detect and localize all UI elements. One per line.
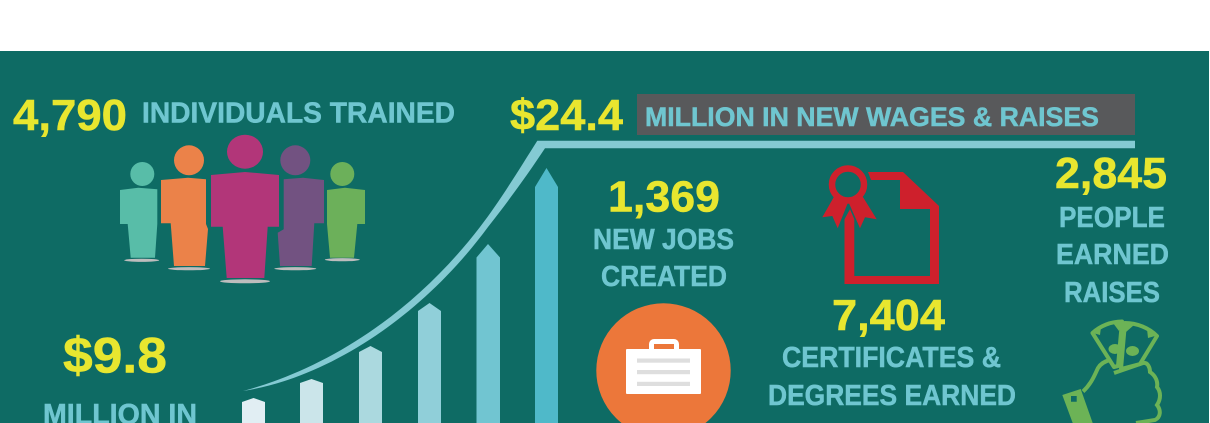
label: created: CREATED [601, 261, 727, 293]
label: earned: EARNED [1056, 239, 1169, 271]
number: 2,845: 2,845 [1055, 149, 1167, 198]
icon: hand holding money [1062, 322, 1160, 423]
label: raises: RAISES [1064, 277, 1160, 309]
icon: certificate with ribbon [822, 168, 939, 284]
number: 1,369: 1,369 [608, 172, 720, 222]
label: individuals trained: INDIVIDUALS TRAINED [142, 98, 455, 130]
stat: people earned raises [1055, 149, 1169, 309]
label: million in new wages and raises: MILLION IN NEW WAGES & RAISES [645, 102, 1099, 132]
number: $9.8: $9.8 [63, 328, 167, 384]
label: new jobs: NEW JOBS [593, 224, 734, 256]
number: 7,404: 7,404 [832, 291, 946, 340]
label: degrees earned: DEGREES EARNED [768, 380, 1016, 412]
stat: new jobs created [593, 172, 734, 293]
stat: $9.8 million [43, 328, 197, 423]
icon: briefcase in orange circle [596, 303, 731, 423]
number: 4,790: 4,790 [13, 91, 127, 140]
banner: grey label bar [637, 94, 1135, 135]
chart: rising arrow bars [242, 168, 558, 423]
stat: individuals trained [13, 91, 455, 140]
number: $24.4: $24.4 [510, 91, 624, 140]
stat: certificates and degrees [768, 291, 1016, 412]
stat: $24.4 million in new wages [510, 91, 1135, 140]
label: people: PEOPLE [1059, 202, 1165, 234]
growth curve line [243, 141, 1135, 391]
label: certificates: CERTIFICATES & [782, 342, 1001, 374]
icon: group of five people [120, 135, 365, 283]
